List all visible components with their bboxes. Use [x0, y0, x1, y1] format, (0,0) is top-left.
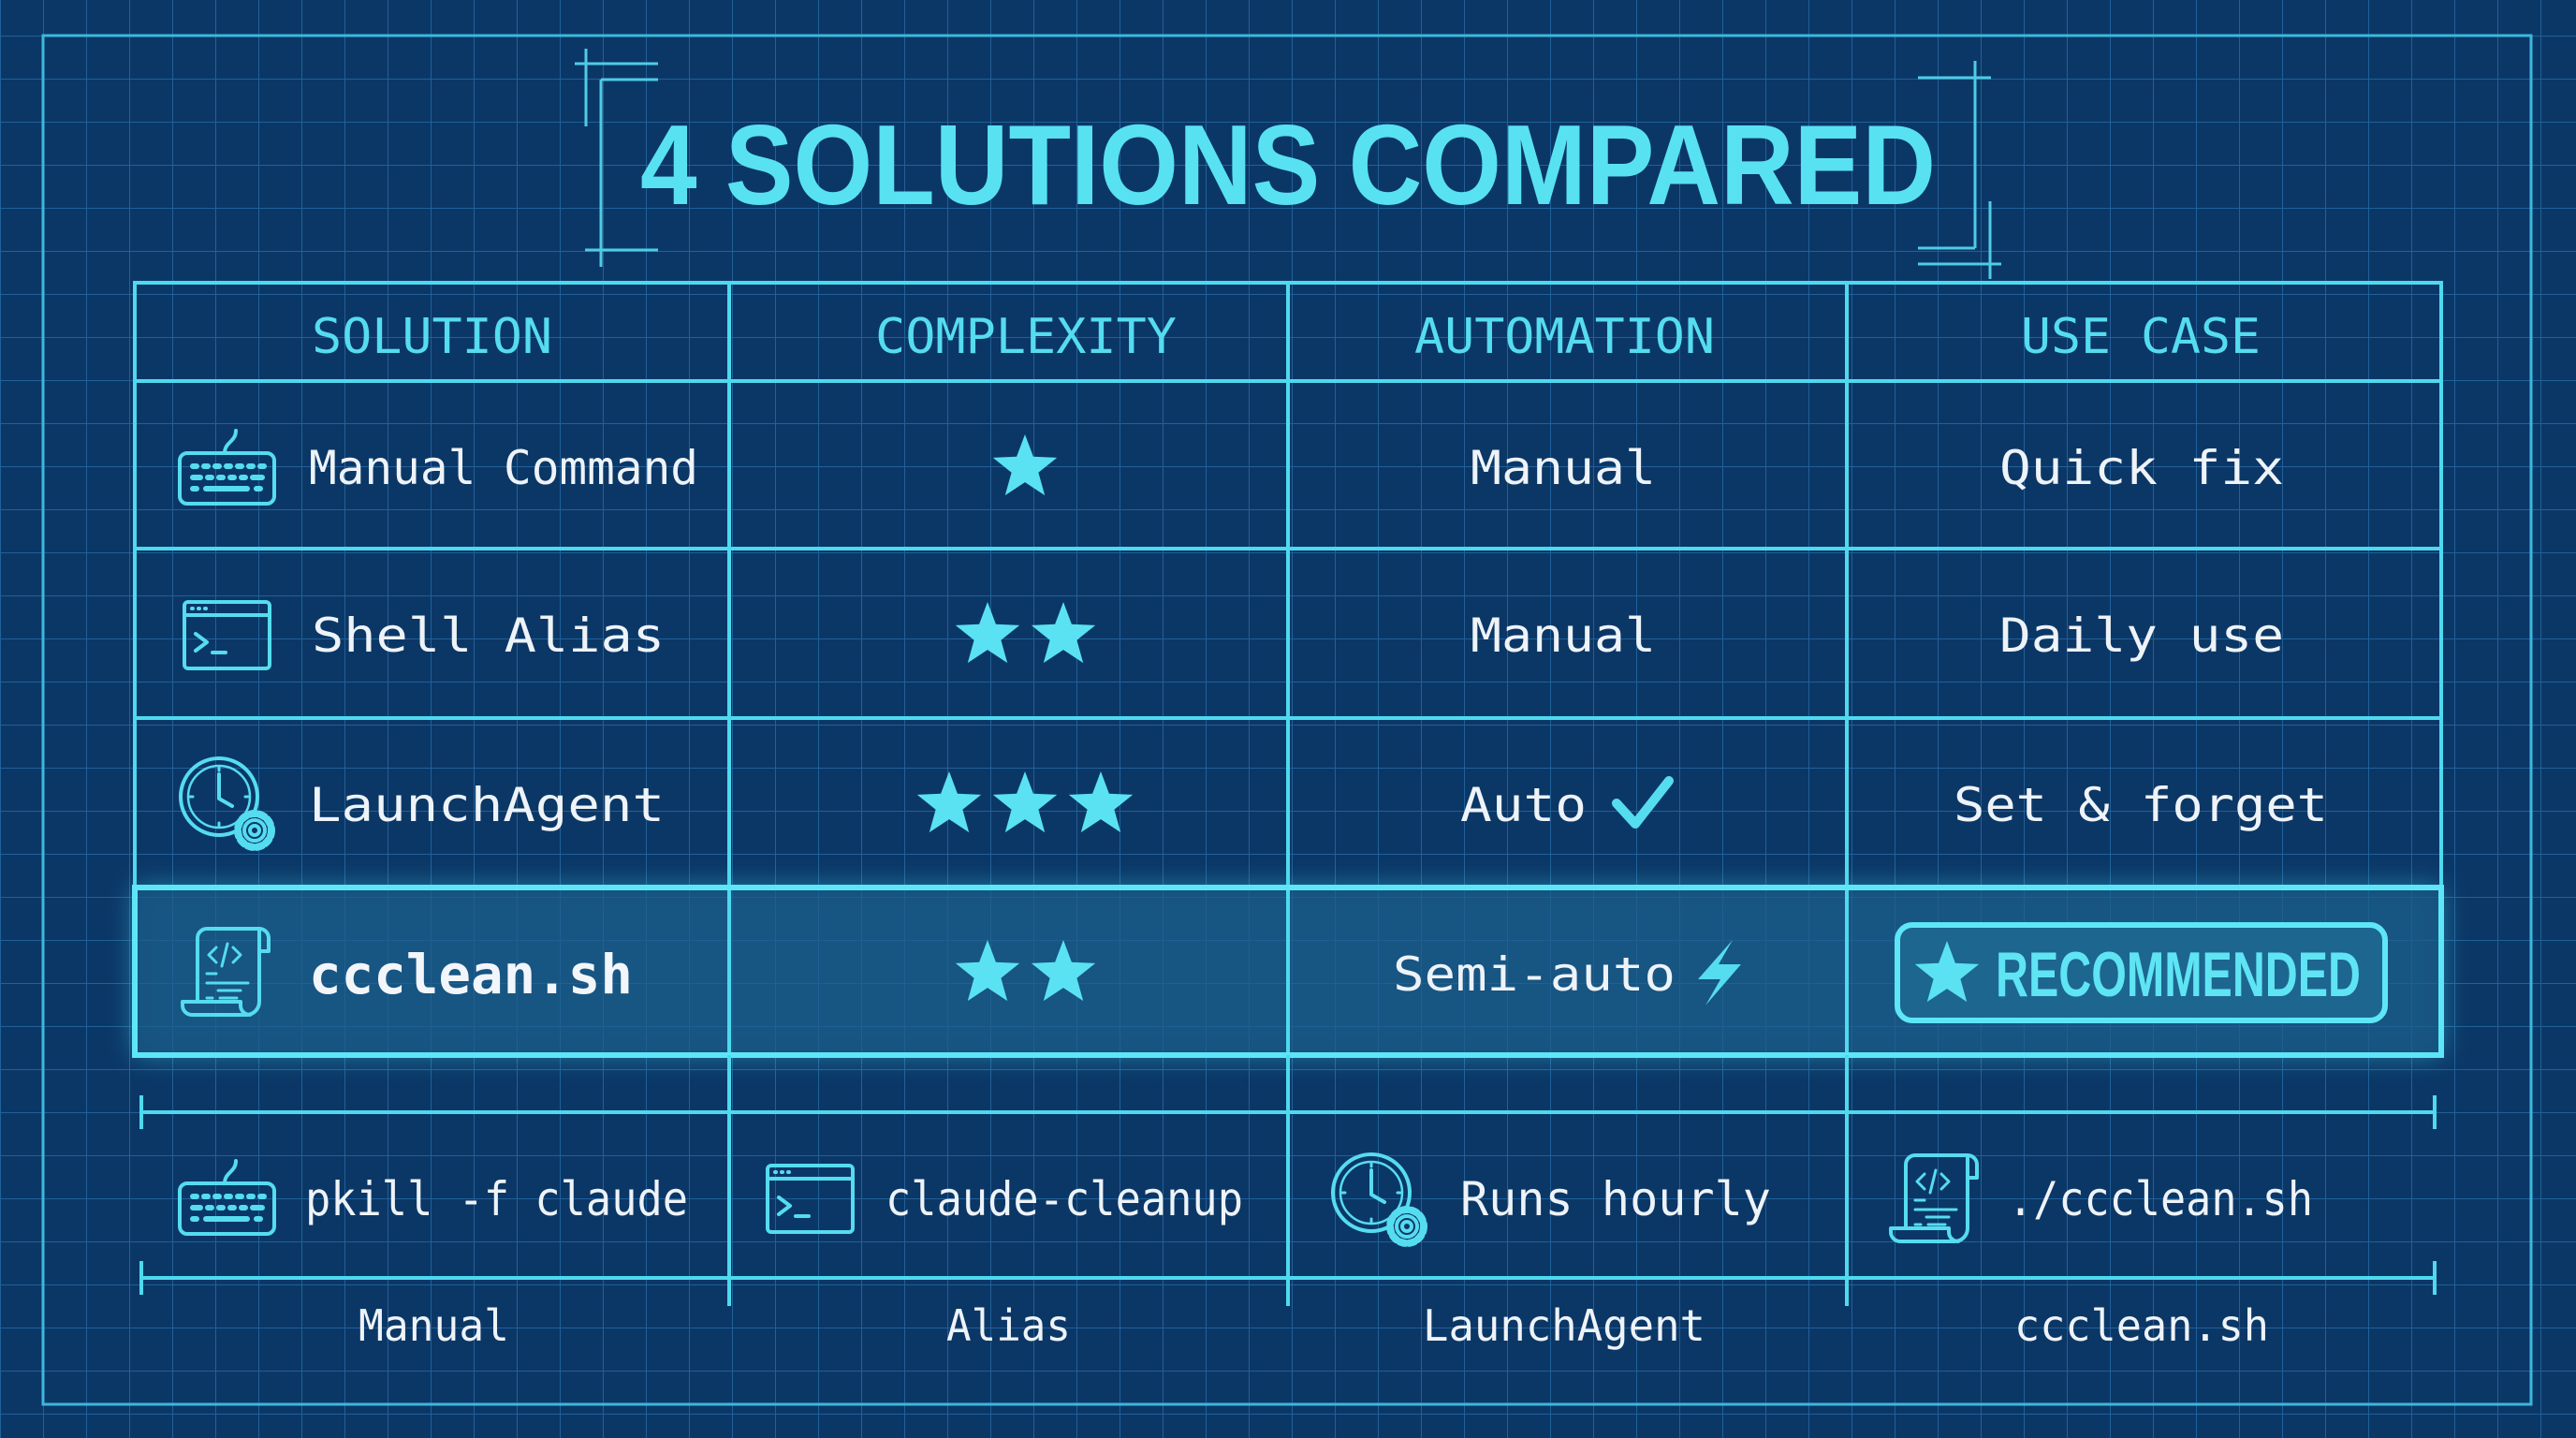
icon: bolt — [1698, 940, 1741, 1005]
row: manual command: Manual Command — [309, 441, 698, 495]
row: manual command — [180, 431, 2284, 504]
row: manual command: Manual — [1471, 441, 1656, 495]
icon: clock gear — [181, 758, 271, 847]
command: alias — [768, 1166, 1243, 1232]
header row: USE CASE — [2021, 309, 2261, 365]
bottom labels: ccclean.sh — [2014, 1300, 2269, 1351]
row: ccclean.sh (recommended): Semi-auto — [1393, 947, 1676, 1002]
icon: script — [183, 929, 269, 1015]
badge: recommended — [1897, 925, 2385, 1020]
header row: COMPLEXITY — [875, 309, 1177, 365]
row: shell alias — [184, 602, 2284, 668]
header row: AUTOMATION — [1414, 309, 1715, 365]
badge: recommended: RECOMMENDED — [1996, 939, 2361, 1010]
bottom labels: LaunchAgent — [1423, 1300, 1705, 1351]
command: script: ./ccclean.sh — [2008, 1172, 2313, 1226]
row: launchagent: Auto — [1460, 778, 1587, 832]
command: alias: claude-cleanup — [886, 1172, 1243, 1226]
header row — [312, 309, 2261, 365]
header row: SOLUTION — [312, 309, 552, 365]
comparison table — [135, 283, 2441, 1055]
bottom labels: Alias — [946, 1300, 1071, 1351]
command: pkill — [180, 1161, 688, 1234]
title: 4 SOLUTIONS COMPARED — [640, 101, 1936, 228]
row: launchagent: Set & forget — [1954, 778, 2328, 832]
icon: keyboard — [180, 431, 274, 504]
row: launchagent — [181, 758, 2328, 847]
command: hourly: Runs hourly — [1460, 1172, 1771, 1226]
title — [575, 49, 2001, 279]
bottom labels — [359, 1300, 2269, 1351]
command: script — [1891, 1155, 2313, 1241]
command: pkill: pkill -f claude — [305, 1172, 688, 1226]
row: shell alias: Daily use — [1999, 609, 2284, 663]
icon: terminal — [184, 602, 270, 668]
row: ccclean.sh (recommended): ccclean.sh — [309, 943, 633, 1006]
bottom commands strip — [141, 1055, 2435, 1351]
command: hourly — [1333, 1154, 1771, 1243]
row: shell alias: Shell Alias — [312, 609, 665, 663]
table lines — [135, 283, 2441, 1055]
highlighted row glow — [135, 888, 2441, 1055]
row: ccclean.sh (recommended) — [183, 925, 2385, 1020]
bottom labels: Manual — [359, 1300, 509, 1351]
row: launchagent: LaunchAgent — [309, 778, 665, 832]
row: shell alias: Manual — [1471, 609, 1656, 663]
row: manual command: Quick fix — [1999, 441, 2284, 495]
title brackets — [575, 49, 2001, 279]
